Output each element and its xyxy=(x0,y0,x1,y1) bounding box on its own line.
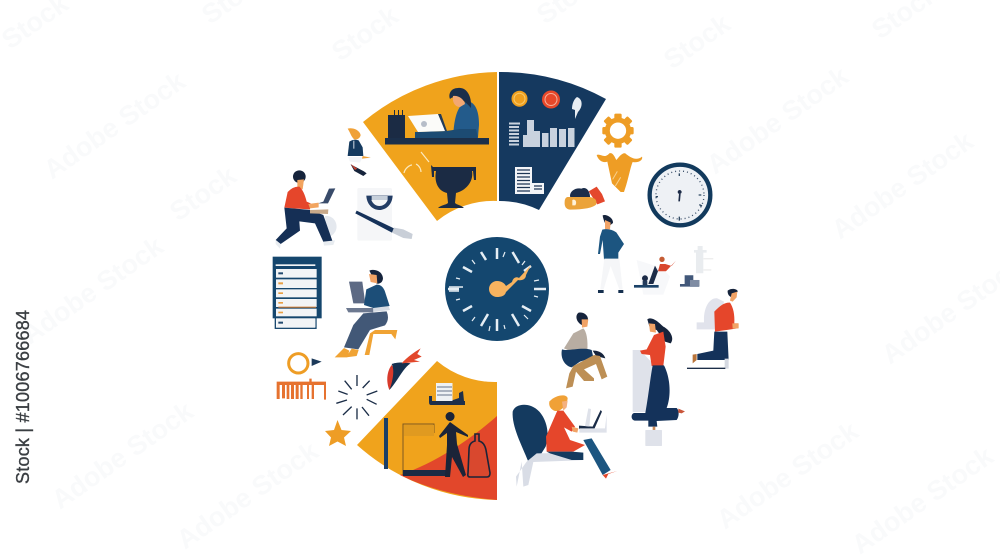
treadmill xyxy=(403,424,450,476)
icon: sunburst xyxy=(336,375,377,419)
figure: woman in armchair with laptop xyxy=(513,395,617,487)
panel: orange and red treadmill wedge xyxy=(357,361,497,500)
form panel xyxy=(273,257,322,328)
icon: leaf plume xyxy=(387,348,422,390)
red bottle xyxy=(468,434,490,477)
icon: small column and boxes xyxy=(680,246,713,287)
icon: hat and bag pile xyxy=(565,187,605,210)
gauge needle xyxy=(489,265,531,297)
watermark pattern: Adobe Stock xyxy=(826,125,979,245)
icon: feather xyxy=(572,97,582,119)
watermark pattern: Stock xyxy=(164,160,242,227)
mini people on ramp xyxy=(634,257,676,295)
bar chart xyxy=(509,120,574,147)
figure: standing man xyxy=(598,215,624,293)
figure: seated woman with crossed legs xyxy=(562,312,607,388)
wall clock xyxy=(650,165,710,225)
panel: orange work wedge xyxy=(363,72,497,221)
watermark pattern: Adobe Stock xyxy=(711,415,864,535)
figure: small seated person xyxy=(348,128,371,176)
icon: notepad with pen xyxy=(355,188,413,241)
icon: orange coin xyxy=(512,91,528,107)
watermark pattern: Adobe Stock xyxy=(16,230,169,350)
figure: woman at computer xyxy=(335,270,397,357)
runner xyxy=(439,412,468,477)
icon: ring and comb xyxy=(277,354,326,400)
figure: kneeling man xyxy=(687,289,739,369)
trophy xyxy=(431,165,476,208)
shelf with books xyxy=(429,383,465,405)
watermark pattern: Adobe Stock xyxy=(171,435,324,555)
icon: orange moustache shape xyxy=(597,153,642,192)
figure: man with laptop xyxy=(276,170,337,249)
icon: star xyxy=(325,420,351,446)
document icon xyxy=(515,167,544,194)
vertical post xyxy=(384,418,388,469)
panel: navy analytics wedge xyxy=(499,72,606,210)
icon: red coin xyxy=(542,90,560,108)
watermark pattern: Adobe Stock xyxy=(38,65,191,185)
watermark pattern: Adobe Stock xyxy=(701,60,854,180)
watermark pattern: Stock xyxy=(658,8,736,75)
figure: standing woman on stand xyxy=(632,318,685,446)
watermark pattern: Stock xyxy=(326,0,404,67)
stock id text: Stock | #1006766684 xyxy=(13,310,33,484)
laptop xyxy=(408,114,446,132)
icon: gear xyxy=(602,114,634,148)
small marks xyxy=(404,152,429,173)
watermark pattern: Adobe Stock xyxy=(846,440,999,560)
desk xyxy=(385,138,489,144)
person at laptop xyxy=(415,88,479,138)
watermark pattern: Adobe Stock xyxy=(46,395,199,515)
pen box xyxy=(388,110,405,138)
gauge ticks xyxy=(448,248,546,331)
center gauge xyxy=(445,237,549,341)
red section xyxy=(400,416,497,500)
